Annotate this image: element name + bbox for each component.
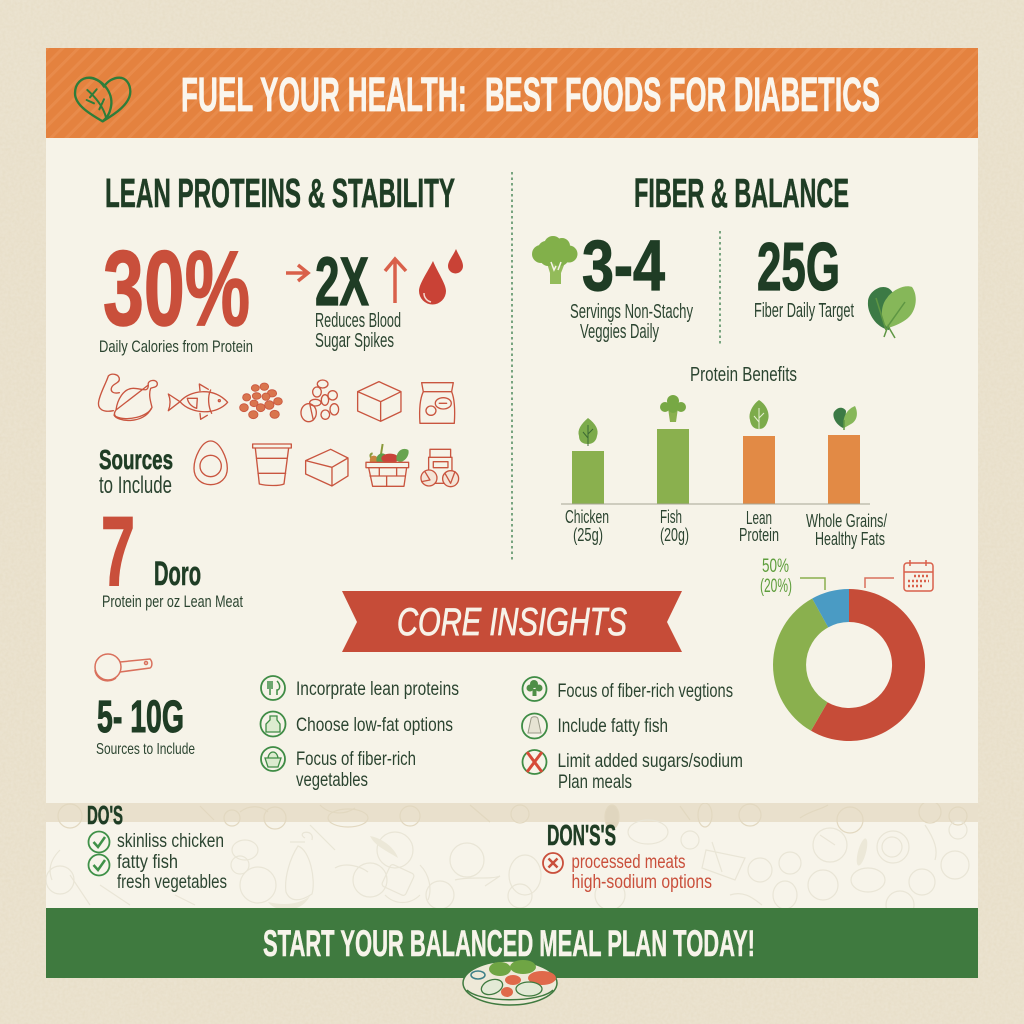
bar: chicken	[565, 451, 609, 545]
icon: egg	[194, 441, 227, 485]
icon: seed bag	[420, 383, 455, 423]
icon: plate of food	[463, 960, 557, 1005]
don'ts: processed meats	[572, 852, 686, 873]
do and don't section	[46, 803, 978, 908]
donut label: 50 percent	[760, 556, 792, 597]
do's	[87, 800, 227, 893]
icon: chicken and bicep	[98, 374, 157, 420]
icon: broccoli	[532, 236, 578, 284]
stat: 7 doro	[101, 496, 243, 611]
stat: 2X	[315, 243, 401, 352]
icon: yogurt cup	[253, 444, 291, 485]
item: fiber-rich vegetables: vegetables	[296, 770, 368, 791]
stat: 3-4 servings: 3-4	[582, 227, 665, 306]
item: limit sugars: Plan meals	[558, 772, 632, 793]
label: sources to include: to Include	[99, 472, 172, 499]
icon: cross	[543, 853, 563, 873]
icon: fish	[168, 384, 228, 419]
don'ts: high-sodium options	[572, 872, 712, 893]
item: low fat	[260, 712, 453, 736]
icon: leaves over grains bar	[833, 406, 857, 430]
title: FUEL YOUR HEALTH:	[181, 69, 467, 122]
item: fiber-rich: Focus of fiber-rich vegtions	[558, 681, 733, 702]
stat: 3-4 servings: Veggies Daily	[580, 321, 659, 343]
filled doodle shapes	[268, 836, 869, 910]
bar: lean protein: Lean	[746, 508, 772, 528]
bar: lean protein: Protein	[739, 525, 779, 545]
icon: check two	[88, 854, 110, 876]
item: lean proteins: Incorprate lean proteins	[296, 679, 459, 700]
doodle band	[46, 803, 978, 822]
label: sources to include: Sources	[99, 444, 173, 475]
stat: 7 doro: Protein per oz Lean Meat	[102, 592, 243, 611]
do's: DO'S	[87, 800, 123, 830]
icon: leaf over lean protein bar	[749, 400, 769, 430]
stat: 7 doro: Doro	[154, 555, 201, 593]
stat: 25G fiber: Fiber Daily Target	[754, 300, 854, 322]
call to action bar	[46, 908, 978, 978]
don'ts: DON'S'S	[547, 820, 616, 852]
icon: measuring scoop	[95, 654, 152, 681]
label: sources to include	[99, 444, 173, 499]
bar: lean protein	[739, 436, 779, 545]
content panel	[46, 138, 978, 803]
item: lean proteins	[261, 676, 459, 700]
stat: 2X: Sugar Spikes	[315, 330, 394, 352]
item: low fat: Choose low-fat options	[296, 715, 453, 736]
item: limit sugars	[522, 750, 743, 793]
don'ts	[543, 820, 712, 893]
icon: calendar	[904, 560, 933, 591]
stat: 3-4 servings	[570, 227, 693, 343]
bar: whole grains and healthy fats: Whole Grains/	[806, 511, 887, 531]
stat: 30 percent: 30%	[103, 228, 250, 348]
icon: leafy greens	[868, 286, 916, 338]
bar chart: protein benefits	[561, 364, 887, 549]
stat: 2X: Reduces Blood	[315, 310, 401, 332]
stat: 25G fiber: 25G	[757, 229, 840, 305]
heading: lean proteins: LEAN PROTEINS & STABILITY	[105, 170, 455, 216]
header banner	[46, 48, 978, 138]
icon: heart leaf logo	[75, 78, 130, 121]
stat: 5-10G with scoop	[95, 654, 195, 758]
icon: leaf over chicken bar	[578, 418, 598, 446]
stat: 3-4 servings: Servings Non-Stachy	[570, 301, 693, 323]
bar: fish	[657, 429, 689, 545]
bar: whole grains and healthy fats: Healthy Fats	[815, 529, 885, 549]
stat: 5-10G with scoop: 5- 10G	[97, 691, 184, 742]
icon: cube	[358, 382, 401, 421]
icon: right arrow	[286, 265, 308, 281]
icon: beans	[301, 380, 339, 422]
food doodle pattern	[46, 803, 970, 908]
item: fiber-rich vegetables: Focus of fiber-rich	[296, 749, 416, 770]
heading: fiber: FIBER & BALANCE	[634, 170, 849, 216]
icon: vegetable basket	[366, 444, 409, 486]
panel: lean proteins and stability	[98, 170, 463, 611]
bar: chicken: (25g)	[573, 525, 603, 545]
icon: lentils	[240, 383, 282, 419]
bar: fish: Fish	[660, 507, 682, 527]
item: fiber-rich vegetables	[261, 747, 416, 791]
stat: 5-10G with scoop: Sources to Include	[96, 741, 195, 758]
item: limit sugars: Limit added sugars/sodium	[558, 751, 743, 772]
icon: supplement jar and nuts	[421, 449, 459, 487]
item: fatty fish: Include fatty fish	[558, 716, 668, 737]
item: fiber-rich	[522, 677, 733, 702]
inner divider	[719, 231, 721, 345]
stat: 30 percent: Daily Calories from Protein	[99, 337, 253, 356]
section divider	[511, 172, 513, 560]
core insights list right	[522, 677, 743, 793]
bar: chicken: Chicken	[565, 507, 609, 527]
bar: whole grains and healthy fats	[806, 435, 887, 549]
chart title: Protein Benefits	[690, 364, 797, 386]
item: fatty fish	[522, 714, 668, 738]
icon: check one	[88, 832, 110, 852]
donut chart	[760, 556, 933, 741]
doodle panel	[46, 822, 978, 908]
stat: 25G fiber	[754, 229, 854, 322]
banner: core insights	[342, 591, 682, 652]
do's: fresh vegetables	[117, 872, 227, 893]
banner: core insights: CORE INSIGHTS	[397, 601, 627, 644]
icon: blood drops	[419, 249, 463, 304]
food icons row one	[98, 374, 459, 487]
icon: up arrow	[385, 259, 406, 303]
core insights list left	[260, 676, 459, 791]
stat: 7 doro: 7	[101, 496, 135, 606]
stat: 2X: 2X	[315, 243, 369, 320]
icon: broccoli over fish bar	[660, 395, 686, 422]
do's: fatty fish	[117, 852, 178, 873]
do's: skinliss chicken	[117, 831, 224, 852]
donut label: 50 percent: 50%	[762, 556, 789, 577]
leader lines	[800, 578, 825, 590]
panel: fiber and balance	[532, 170, 916, 549]
donut label: 50 percent: (20%)	[760, 576, 792, 597]
chart axis	[561, 503, 870, 505]
stat: 30 percent	[99, 228, 253, 356]
icon: tofu block	[306, 449, 348, 486]
bar: fish: (20g)	[660, 525, 689, 545]
